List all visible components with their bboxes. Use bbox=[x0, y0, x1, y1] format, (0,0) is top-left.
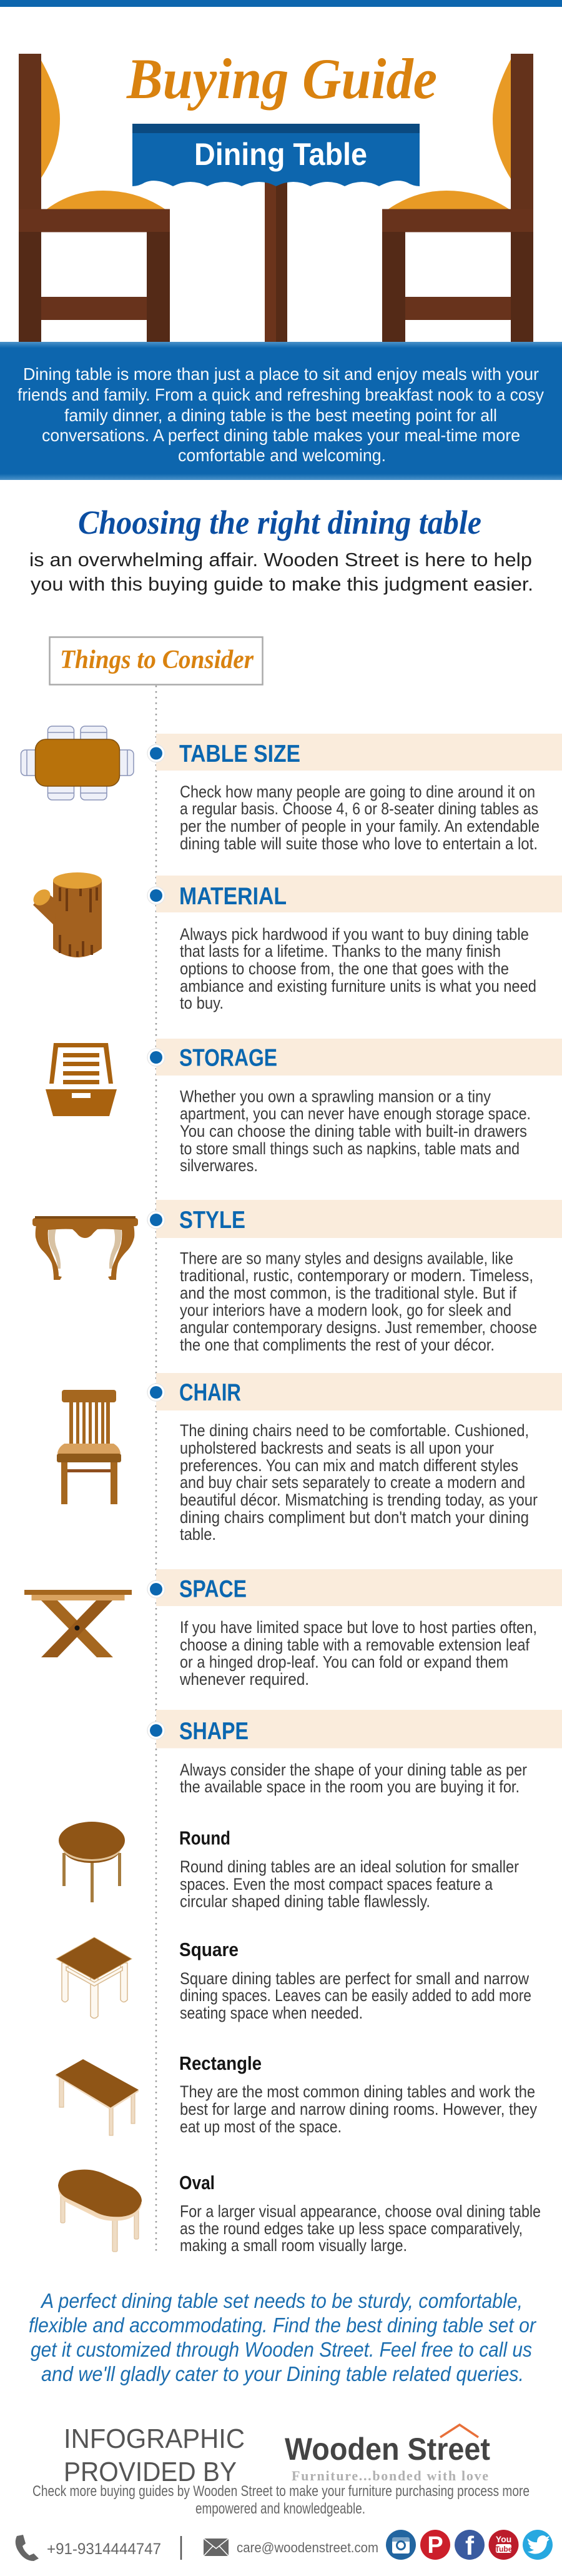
section: storage bbox=[46, 1039, 562, 1175]
section: table size bbox=[21, 726, 562, 853]
heading: rectangle: Rectangle bbox=[179, 2052, 262, 2074]
heading: oval: Oval bbox=[179, 2172, 215, 2194]
text: table size bbox=[180, 782, 540, 853]
panel: introduction bbox=[0, 342, 562, 480]
text: material bbox=[180, 925, 536, 1012]
text: shape: the available space in the room you are buying it for. bbox=[180, 1777, 520, 1796]
things to consider box bbox=[50, 637, 262, 685]
icon: youtube bbox=[488, 2530, 518, 2560]
icon: round table bbox=[59, 1822, 125, 1902]
section: chair bbox=[57, 1373, 562, 1544]
heading: table size: TABLE SIZE bbox=[179, 741, 300, 767]
things to consider box: Things to Consider bbox=[60, 646, 254, 674]
text: storage: You can choose the dining table with built-in drawers bbox=[180, 1122, 527, 1141]
text: material: to buy. bbox=[180, 994, 224, 1012]
shape: oval bbox=[58, 2170, 541, 2255]
text: chair: dining chairs compliment but don't match your dining bbox=[180, 1508, 529, 1527]
panel: introduction: family dinner, a dining table is the best meeting point for all bbox=[64, 406, 497, 425]
text: chair bbox=[180, 1421, 538, 1544]
logo: wooden street: Wooden Street bbox=[285, 2432, 490, 2467]
text: storage bbox=[180, 1087, 531, 1175]
text: oval: making a small room visually large. bbox=[180, 2236, 407, 2255]
logo: wooden street bbox=[285, 2425, 490, 2484]
icon: carved table bbox=[32, 1216, 138, 1280]
contact: email bbox=[204, 2539, 378, 2556]
text: style: There are so many styles and designs available, like bbox=[180, 1249, 513, 1267]
text: chair: upholstered backrests and seats is all upon your bbox=[180, 1439, 494, 1457]
icon: youtube: You bbox=[496, 2534, 511, 2544]
heading: material: MATERIAL bbox=[179, 883, 287, 910]
logo: wooden street: Furniture...bonded with love bbox=[292, 2468, 488, 2484]
text: chair: preferences. You can mix and match different styles bbox=[180, 1456, 518, 1475]
credit text: PROVIDED BY bbox=[64, 2457, 237, 2487]
icon: oval table bbox=[58, 2170, 142, 2252]
text: style: your interiors have a modern look, go for sleek and bbox=[180, 1301, 511, 1320]
icon: chair bbox=[57, 1390, 121, 1504]
lead paragraph: is an overwhelming affair. Wooden Street is here to help bbox=[29, 549, 532, 571]
text: space: whenever required. bbox=[179, 1670, 309, 1689]
text: square: seating space when needed. bbox=[180, 2004, 363, 2022]
table cloth bbox=[132, 124, 420, 186]
text: round: Round dining tables are an ideal solution for smaller bbox=[180, 1857, 519, 1876]
header band bbox=[0, 0, 562, 7]
section: material bbox=[30, 872, 562, 1012]
heading: round: Round bbox=[179, 1827, 230, 1849]
icon: facebook bbox=[455, 2530, 485, 2560]
text: style bbox=[180, 1249, 537, 1354]
icon: table from above bbox=[21, 726, 134, 800]
text: material: Always pick hardwood if you want to buy dining table bbox=[180, 925, 529, 944]
icon: log bbox=[30, 872, 102, 957]
text: chair: table. bbox=[180, 1525, 216, 1544]
header illustration: chairs and table bbox=[19, 54, 533, 342]
icon: instagram bbox=[386, 2530, 416, 2560]
icon: twitter bbox=[523, 2530, 553, 2560]
heading: storage: STORAGE bbox=[179, 1045, 277, 1071]
subtitle: Dining Table bbox=[194, 137, 367, 172]
contact: email: care@woodenstreet.com bbox=[237, 2540, 378, 2555]
social icons bbox=[386, 2530, 553, 2560]
text: storage: Whether you own a sprawling mansion or a tiny bbox=[180, 1087, 491, 1106]
table post bbox=[265, 181, 287, 342]
heading: space: SPACE bbox=[179, 1576, 247, 1602]
text: shape bbox=[180, 1760, 527, 1796]
heading: square: Square bbox=[179, 1939, 239, 1960]
section: shape bbox=[147, 1710, 562, 1796]
icon: square table bbox=[56, 1937, 132, 2019]
panel: introduction: comfortable and welcoming. bbox=[178, 446, 386, 465]
shape: round bbox=[59, 1822, 519, 1911]
shape: square bbox=[56, 1937, 531, 2022]
text: rectangle bbox=[180, 2082, 537, 2136]
text: round: spaces. Even the most compact spaces feature a bbox=[180, 1875, 493, 1894]
title: Buying Guide bbox=[126, 47, 437, 111]
icon: envelope bbox=[204, 2539, 229, 2556]
panel: introduction: friends and family. From a quick and refreshing breakfast nook to a cosy bbox=[17, 385, 544, 404]
text: oval bbox=[180, 2202, 541, 2255]
icon: drawer bbox=[46, 1043, 117, 1116]
closing statement: A perfect dining table set needs to be sturdy, comfortable, bbox=[40, 2289, 523, 2312]
closing statement bbox=[29, 2289, 537, 2385]
panel: introduction: Dining table is more than just a place to sit and enjoy meals with your bbox=[23, 364, 539, 384]
heading: shape: SHAPE bbox=[179, 1718, 249, 1745]
shape: rectangle bbox=[56, 2052, 537, 2136]
credit text: INFOGRAPHIC bbox=[64, 2424, 245, 2454]
text: square bbox=[180, 1969, 531, 2022]
text: space: or a hinged drop-leaf. You can fold or expand them bbox=[180, 1652, 508, 1671]
contact: phone: +91-9314444747 bbox=[47, 2540, 161, 2558]
contact: phone bbox=[16, 2535, 161, 2561]
heading: choosing the right dining table: Choosing the right dining table bbox=[78, 504, 481, 541]
left chair bbox=[19, 54, 170, 342]
text: material: options to choose from, the one that goes with the bbox=[180, 959, 509, 978]
icon: rectangle table bbox=[56, 2059, 139, 2135]
right chair bbox=[382, 54, 533, 342]
icon: youtube: Tube bbox=[495, 2545, 513, 2554]
text: rectangle: eat up most of the space. bbox=[180, 2117, 342, 2136]
text: material: that lasts for a lifetime. Thanks to the many finish bbox=[180, 942, 501, 961]
footer note: empowered and knowledgeable. bbox=[195, 2500, 365, 2517]
text: round bbox=[180, 1857, 519, 1911]
text: style: the one that compliments the rest of your décor. bbox=[180, 1335, 495, 1354]
icon: pinterest: P bbox=[427, 2532, 443, 2559]
heading: chair: CHAIR bbox=[179, 1379, 241, 1406]
text: space bbox=[179, 1618, 537, 1689]
heading: style: STYLE bbox=[179, 1207, 245, 1234]
closing statement: and we'll gladly cater to your Dining table related queries. bbox=[41, 2362, 524, 2385]
icon: pinterest bbox=[420, 2530, 450, 2560]
lead paragraph: you with this buying guide to make this judgment easier. bbox=[31, 573, 533, 595]
icon: facebook: f bbox=[465, 2531, 475, 2560]
icon: folding table bbox=[24, 1590, 132, 1657]
section: space bbox=[24, 1569, 562, 1689]
text: storage: silverwares. bbox=[180, 1156, 258, 1175]
footer note bbox=[32, 2483, 530, 2517]
icon: phone bbox=[16, 2535, 39, 2561]
text: round: circular shaped dining table flawlessly. bbox=[180, 1892, 430, 1911]
panel: introduction: conversations. A perfect dining table makes your meal-time more bbox=[42, 426, 520, 445]
text: style: and the most common, is the traditional style. But if bbox=[180, 1284, 516, 1302]
section: style bbox=[32, 1200, 562, 1354]
credit text bbox=[64, 2424, 245, 2487]
lead paragraph bbox=[29, 549, 533, 595]
